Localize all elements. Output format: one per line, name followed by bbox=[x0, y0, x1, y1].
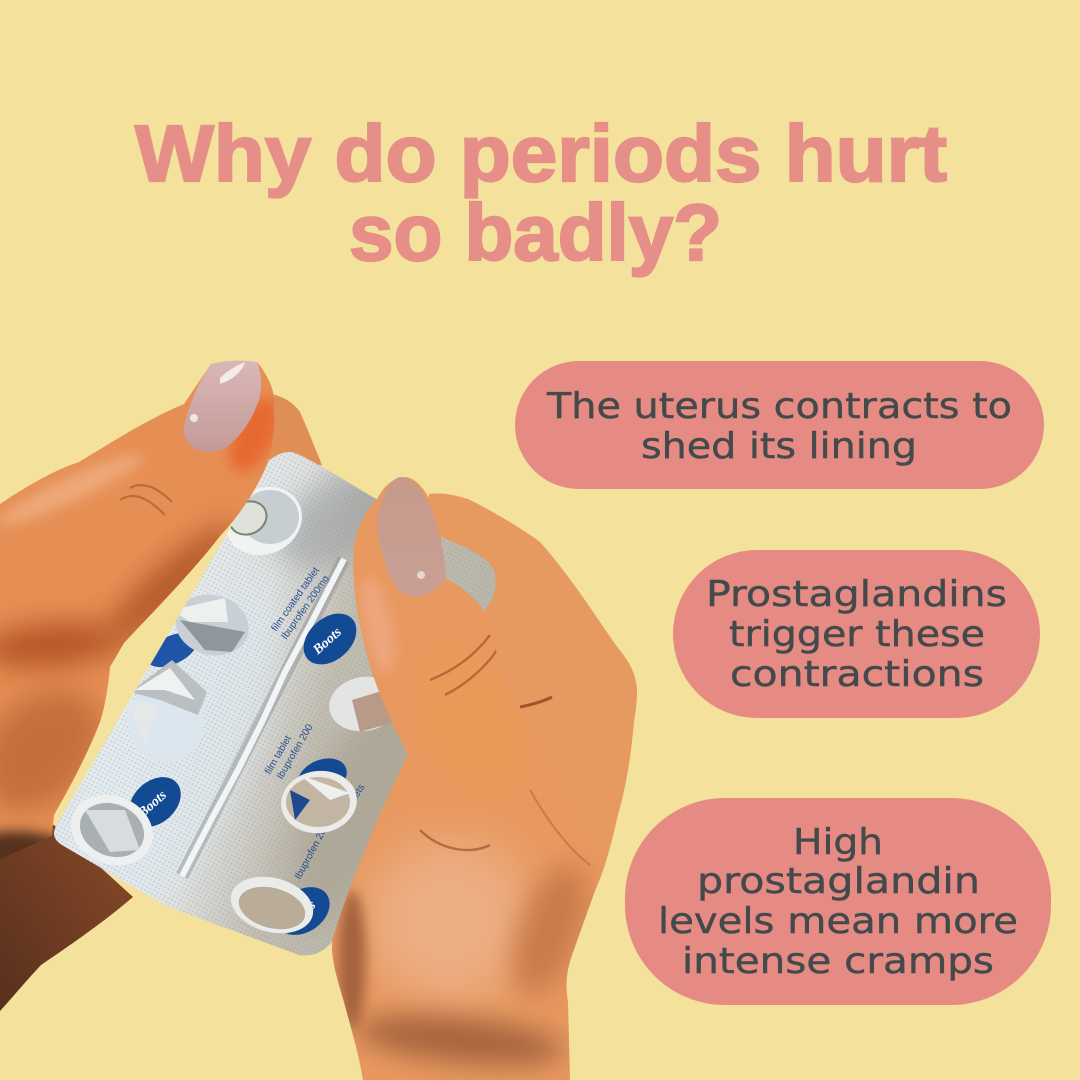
back fingers of right hand bbox=[425, 493, 637, 900]
torn pocket bbox=[127, 660, 207, 762]
callout: uterus contracts: shed its lining bbox=[641, 426, 917, 467]
left thumbnail bbox=[184, 361, 261, 452]
torn pocket bbox=[71, 795, 153, 866]
perforation line bbox=[182, 559, 344, 876]
blister pack bbox=[54, 452, 496, 956]
title: so badly? bbox=[349, 188, 722, 277]
callout: high levels: levels mean more bbox=[658, 901, 1018, 942]
right thumbnail bbox=[377, 477, 446, 597]
pack print: Ibuprofen 200mg bbox=[121, 796, 168, 866]
torn pocket bbox=[329, 676, 392, 732]
callout: high levels: prostaglandin bbox=[697, 861, 980, 902]
logo: Boots bbox=[298, 758, 347, 778]
callout: prostaglandins: contractions bbox=[730, 654, 984, 695]
pack print: Ibuprofen bbox=[133, 565, 165, 607]
pack print: Ibuprofen 200mg bbox=[293, 809, 338, 881]
callout: uterus contracts: The uterus contracts to bbox=[546, 386, 1012, 427]
pack print: tablets bbox=[343, 782, 367, 814]
callout: prostaglandins: Prostaglandins bbox=[706, 574, 1007, 615]
photo: hands holding a blister pack bbox=[0, 361, 637, 1080]
logo: Boots: Boots bbox=[135, 788, 170, 822]
logo: Boots bbox=[286, 887, 330, 935]
callout: prostaglandins: trigger these bbox=[729, 614, 985, 655]
pack print: Ibuprofen 200 bbox=[275, 722, 316, 782]
pack print: Ibuprofen 200mg bbox=[279, 573, 332, 642]
empty pocket with pill bbox=[227, 487, 302, 555]
torn pocket bbox=[230, 876, 314, 934]
torn pocket bbox=[176, 594, 248, 656]
pack print: film coated tablet bbox=[269, 565, 322, 634]
pack print bbox=[121, 565, 367, 881]
callout: prostaglandins bbox=[673, 550, 1040, 718]
logo: Boots bbox=[150, 634, 194, 668]
logo: Boots bbox=[304, 614, 356, 664]
logo: Boots: Boots bbox=[310, 625, 345, 659]
title bbox=[135, 109, 947, 277]
callout: high levels: intense cramps bbox=[682, 941, 994, 982]
left hand thumb and palm bbox=[0, 362, 289, 879]
lower left hand in shadow bbox=[0, 820, 133, 1011]
logo: Boots bbox=[130, 777, 181, 826]
logo: Boots: Boots bbox=[282, 897, 319, 929]
back finger of left hand bbox=[262, 394, 322, 468]
title: Why do periods hurt bbox=[135, 109, 947, 198]
torn pocket bbox=[281, 770, 357, 834]
right hand thumb and palm bbox=[332, 477, 606, 1080]
callout: uterus contracts bbox=[515, 361, 1044, 489]
callout: high levels bbox=[625, 798, 1051, 1005]
callout: high levels: High bbox=[793, 822, 883, 863]
pack print: film tablet bbox=[263, 734, 294, 776]
